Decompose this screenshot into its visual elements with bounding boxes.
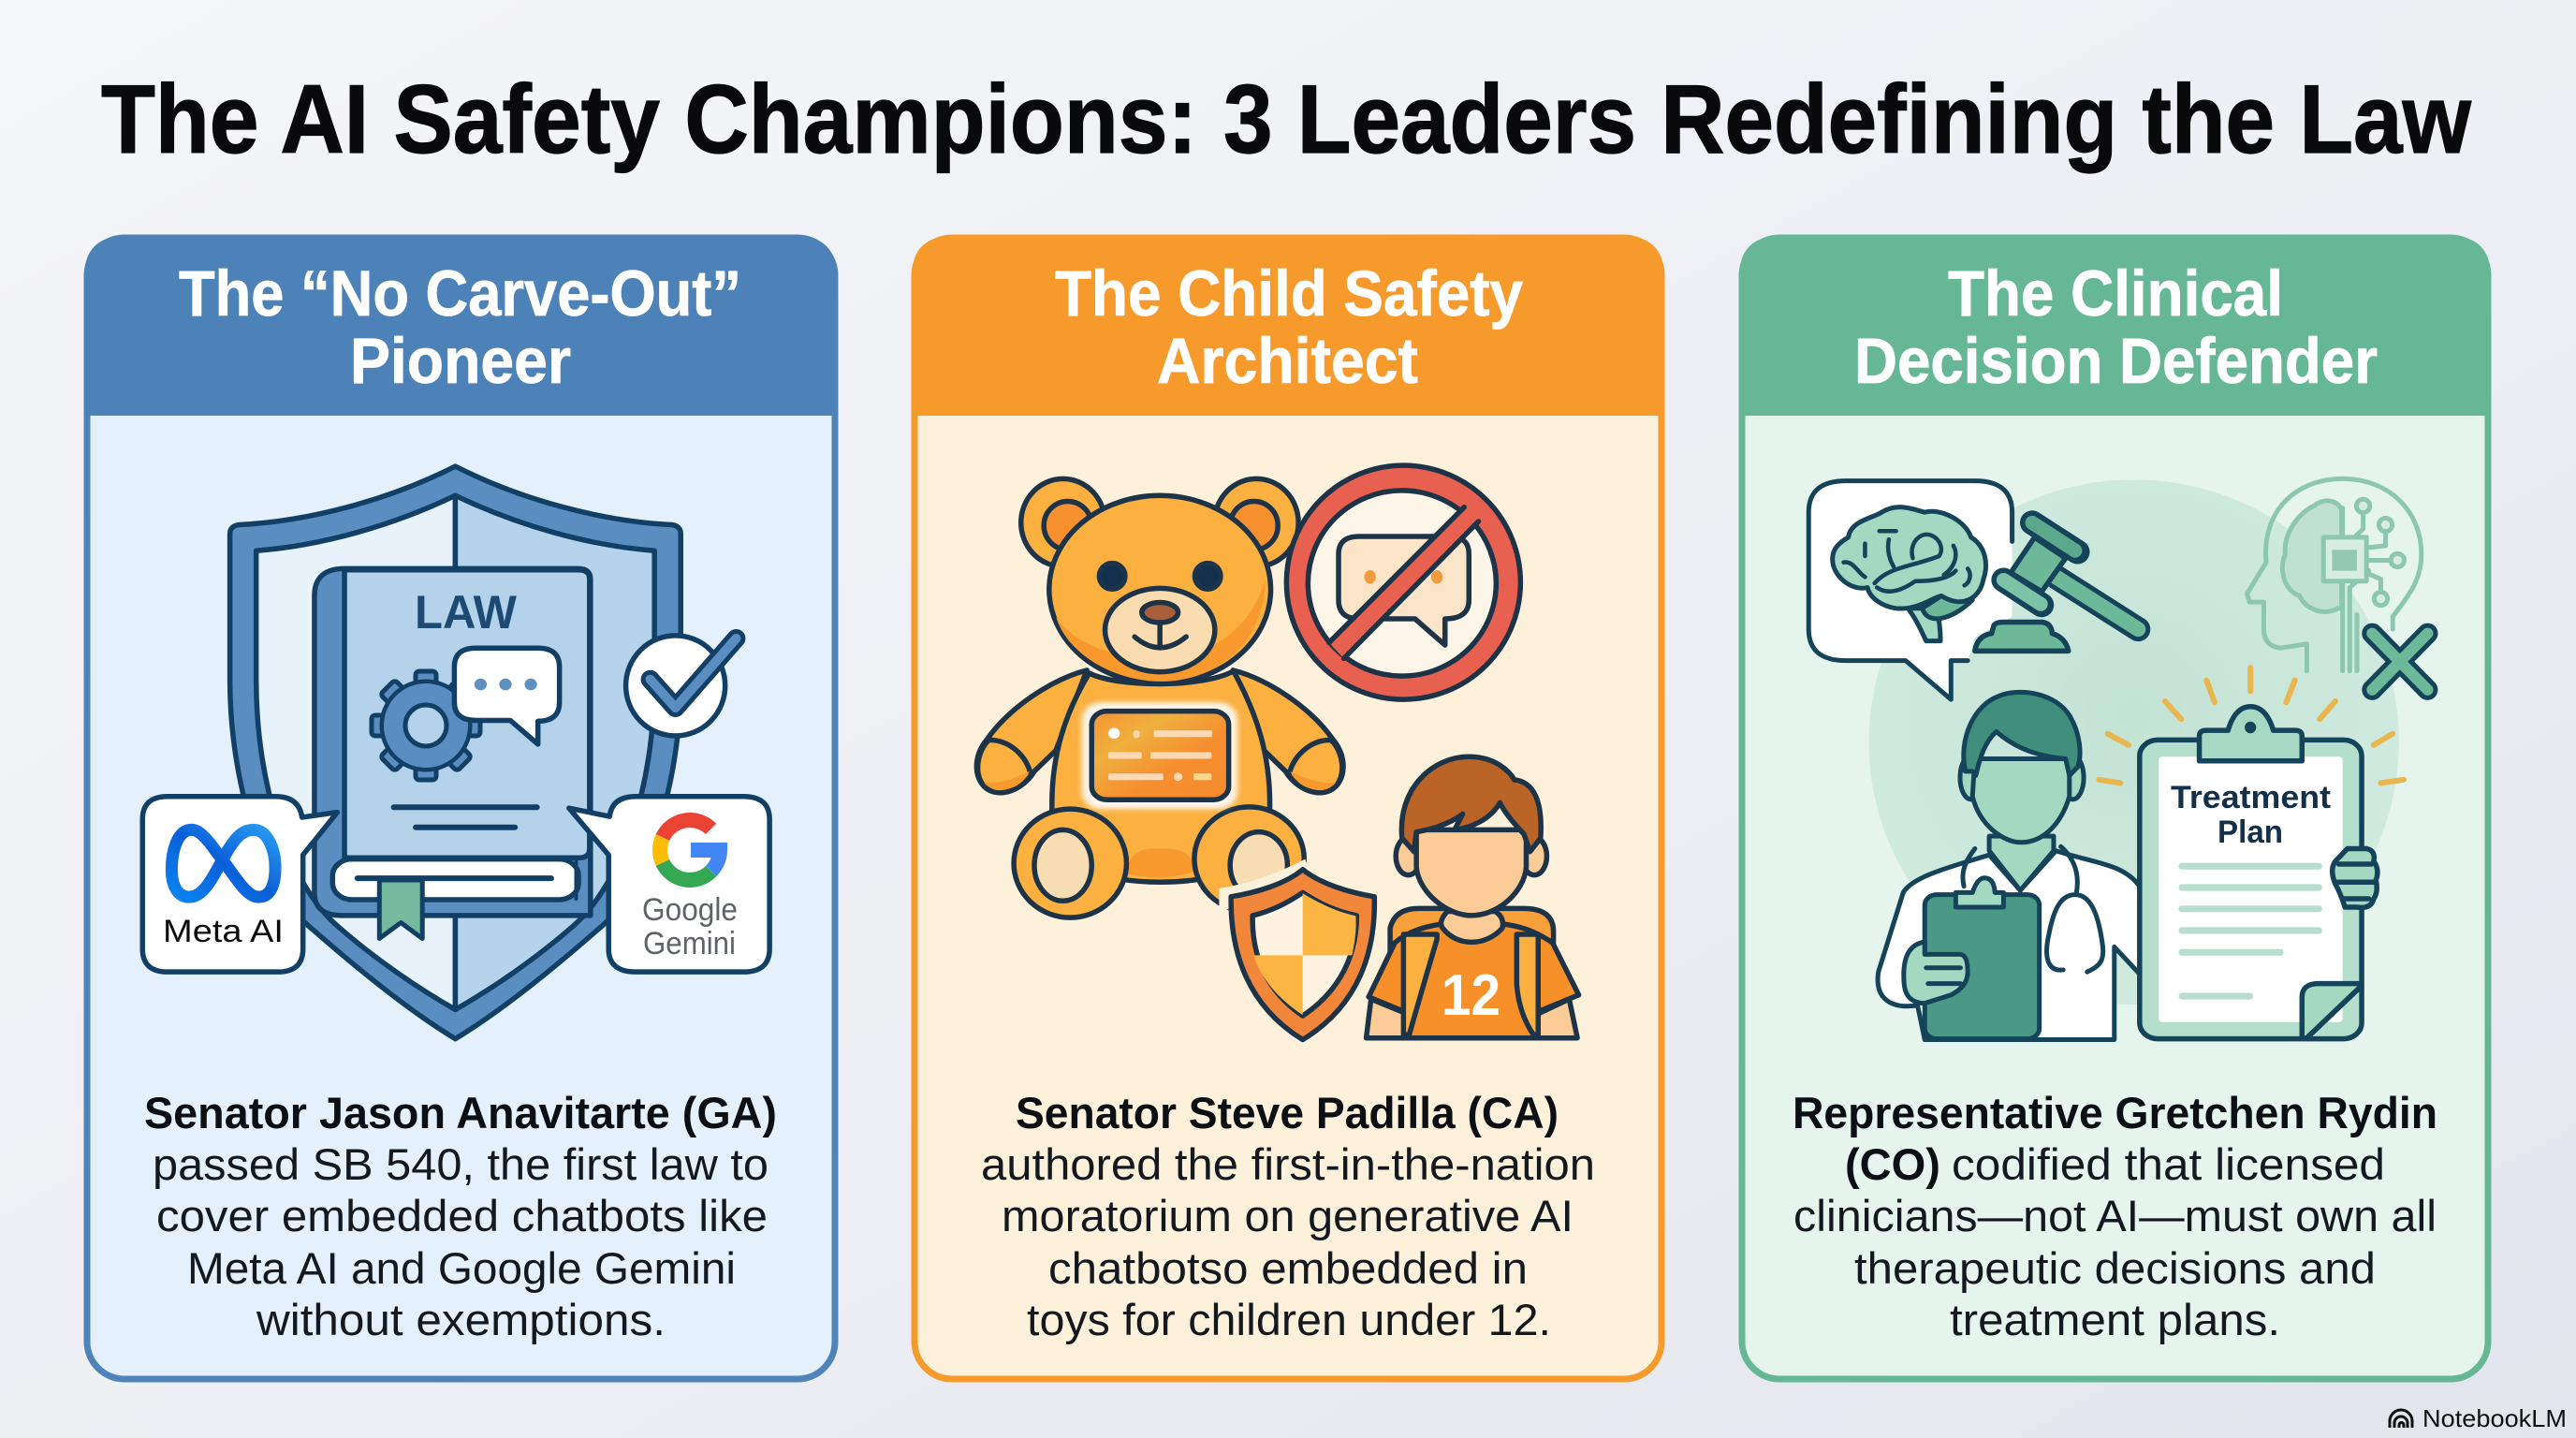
heading	[1854, 257, 2378, 397]
icon: treatment plan clipboard	[2140, 707, 2378, 1039]
icon: green X	[2372, 634, 2427, 690]
description text: Meta AI and Google Gemini	[187, 1243, 736, 1293]
description text: treatment plans.	[1950, 1295, 2280, 1344]
icon: teddy bear	[976, 478, 1343, 917]
icon: Google Gemini tile	[569, 797, 769, 972]
panel: Clinical Decision Defender	[1739, 236, 2491, 1379]
title: The AI Safety Champions:	[101, 66, 1197, 174]
label: Treatment Plan: Treatment	[2171, 780, 2331, 815]
header band	[84, 236, 837, 416]
panel: No Carve-Out Pioneer	[84, 236, 837, 1379]
description text: Senator Jason Anavitarte (GA)	[144, 1088, 777, 1137]
heading: The “No Carve-Out”	[179, 257, 741, 330]
title	[101, 66, 2472, 174]
icon: shield	[230, 466, 681, 1039]
description text	[981, 1088, 1595, 1344]
description text: clinicians—not AI—must own all	[1793, 1191, 2437, 1240]
description text: authored the first-in-the-nation	[981, 1139, 1595, 1189]
icon: NotebookLM logo	[2390, 1410, 2412, 1428]
heading: The Child Safety	[1055, 257, 1523, 330]
icon: Google G	[660, 820, 720, 880]
description text: passed SB 540, the first law to	[153, 1139, 768, 1189]
description text: without exemptions.	[256, 1295, 666, 1344]
icon label: Google Gemini	[642, 892, 738, 961]
icon label: LAW: LAW	[415, 586, 518, 638]
icon: glowing screen	[1082, 702, 1237, 809]
icon: yellow rays	[2099, 668, 2404, 783]
heading: Architect	[1157, 325, 1418, 397]
icon: faded AI head	[2247, 478, 2422, 671]
panel: Child Safety Architect	[912, 236, 1664, 1379]
label: Treatment Plan: Plan	[2217, 814, 2283, 850]
header band	[1739, 236, 2491, 416]
background circle	[1869, 479, 2399, 1005]
label: Treatment Plan	[2171, 780, 2331, 850]
description text	[1793, 1088, 2437, 1344]
panel frame	[915, 238, 1661, 1379]
icon: law book	[315, 568, 591, 938]
description text: cover embedded chatbots like	[156, 1191, 768, 1240]
icon label: Google Gemini: Gemini	[643, 926, 736, 961]
illustration: teddy bear, no-chat sign, child	[976, 465, 1579, 1039]
icon label: Google Gemini: Google	[642, 892, 738, 928]
icon: checkmark badge	[626, 636, 736, 736]
icon: Meta AI tile	[142, 797, 337, 972]
heading: Decision Defender	[1854, 325, 2378, 397]
description text: Senator Steve Padilla (CA)	[1016, 1088, 1559, 1137]
heading	[1055, 257, 1523, 397]
cream cut-out around shield	[1219, 859, 1324, 909]
NotebookLM watermark: NotebookLM	[2422, 1404, 2567, 1432]
description text: moratorium on generative AI	[1002, 1191, 1573, 1240]
panel frame	[87, 238, 835, 1379]
description text	[144, 1088, 777, 1344]
label: number 12: 12	[1442, 963, 1500, 1028]
illustration: clinician, gavel, treatment plan	[1808, 478, 2427, 1039]
description text: Representative Gretchen Rydin	[1793, 1088, 2437, 1137]
heading	[179, 257, 741, 397]
panel frame	[1742, 238, 2488, 1379]
description text: (CO)	[1845, 1139, 1940, 1189]
title: 3 Leaders Redefining the Law	[1223, 66, 2472, 174]
icon: child with backpack	[1367, 756, 1579, 1038]
icon: clinician	[1878, 692, 2140, 1039]
icon: no-chat sign	[1286, 465, 1520, 699]
header band	[912, 236, 1664, 416]
description text: codified that licensed	[1952, 1139, 2385, 1189]
icon: speech bubble with brain	[1808, 481, 2012, 699]
heading: Pioneer	[350, 325, 571, 397]
icon: gear	[372, 671, 480, 780]
heading: The Clinical	[1948, 257, 2283, 330]
description text: chatbotso embedded in	[1048, 1243, 1528, 1293]
description text: therapeutic decisions and	[1854, 1243, 2376, 1293]
icon: gavel	[1975, 522, 2138, 651]
illustration: shield, law book and chatbots	[142, 466, 769, 1039]
icon: small shield	[1231, 870, 1374, 1039]
icon: speech bubble on book	[454, 648, 560, 744]
description text: toys for children under 12.	[1027, 1295, 1551, 1344]
icon label: Meta AI: Meta AI	[163, 914, 284, 949]
